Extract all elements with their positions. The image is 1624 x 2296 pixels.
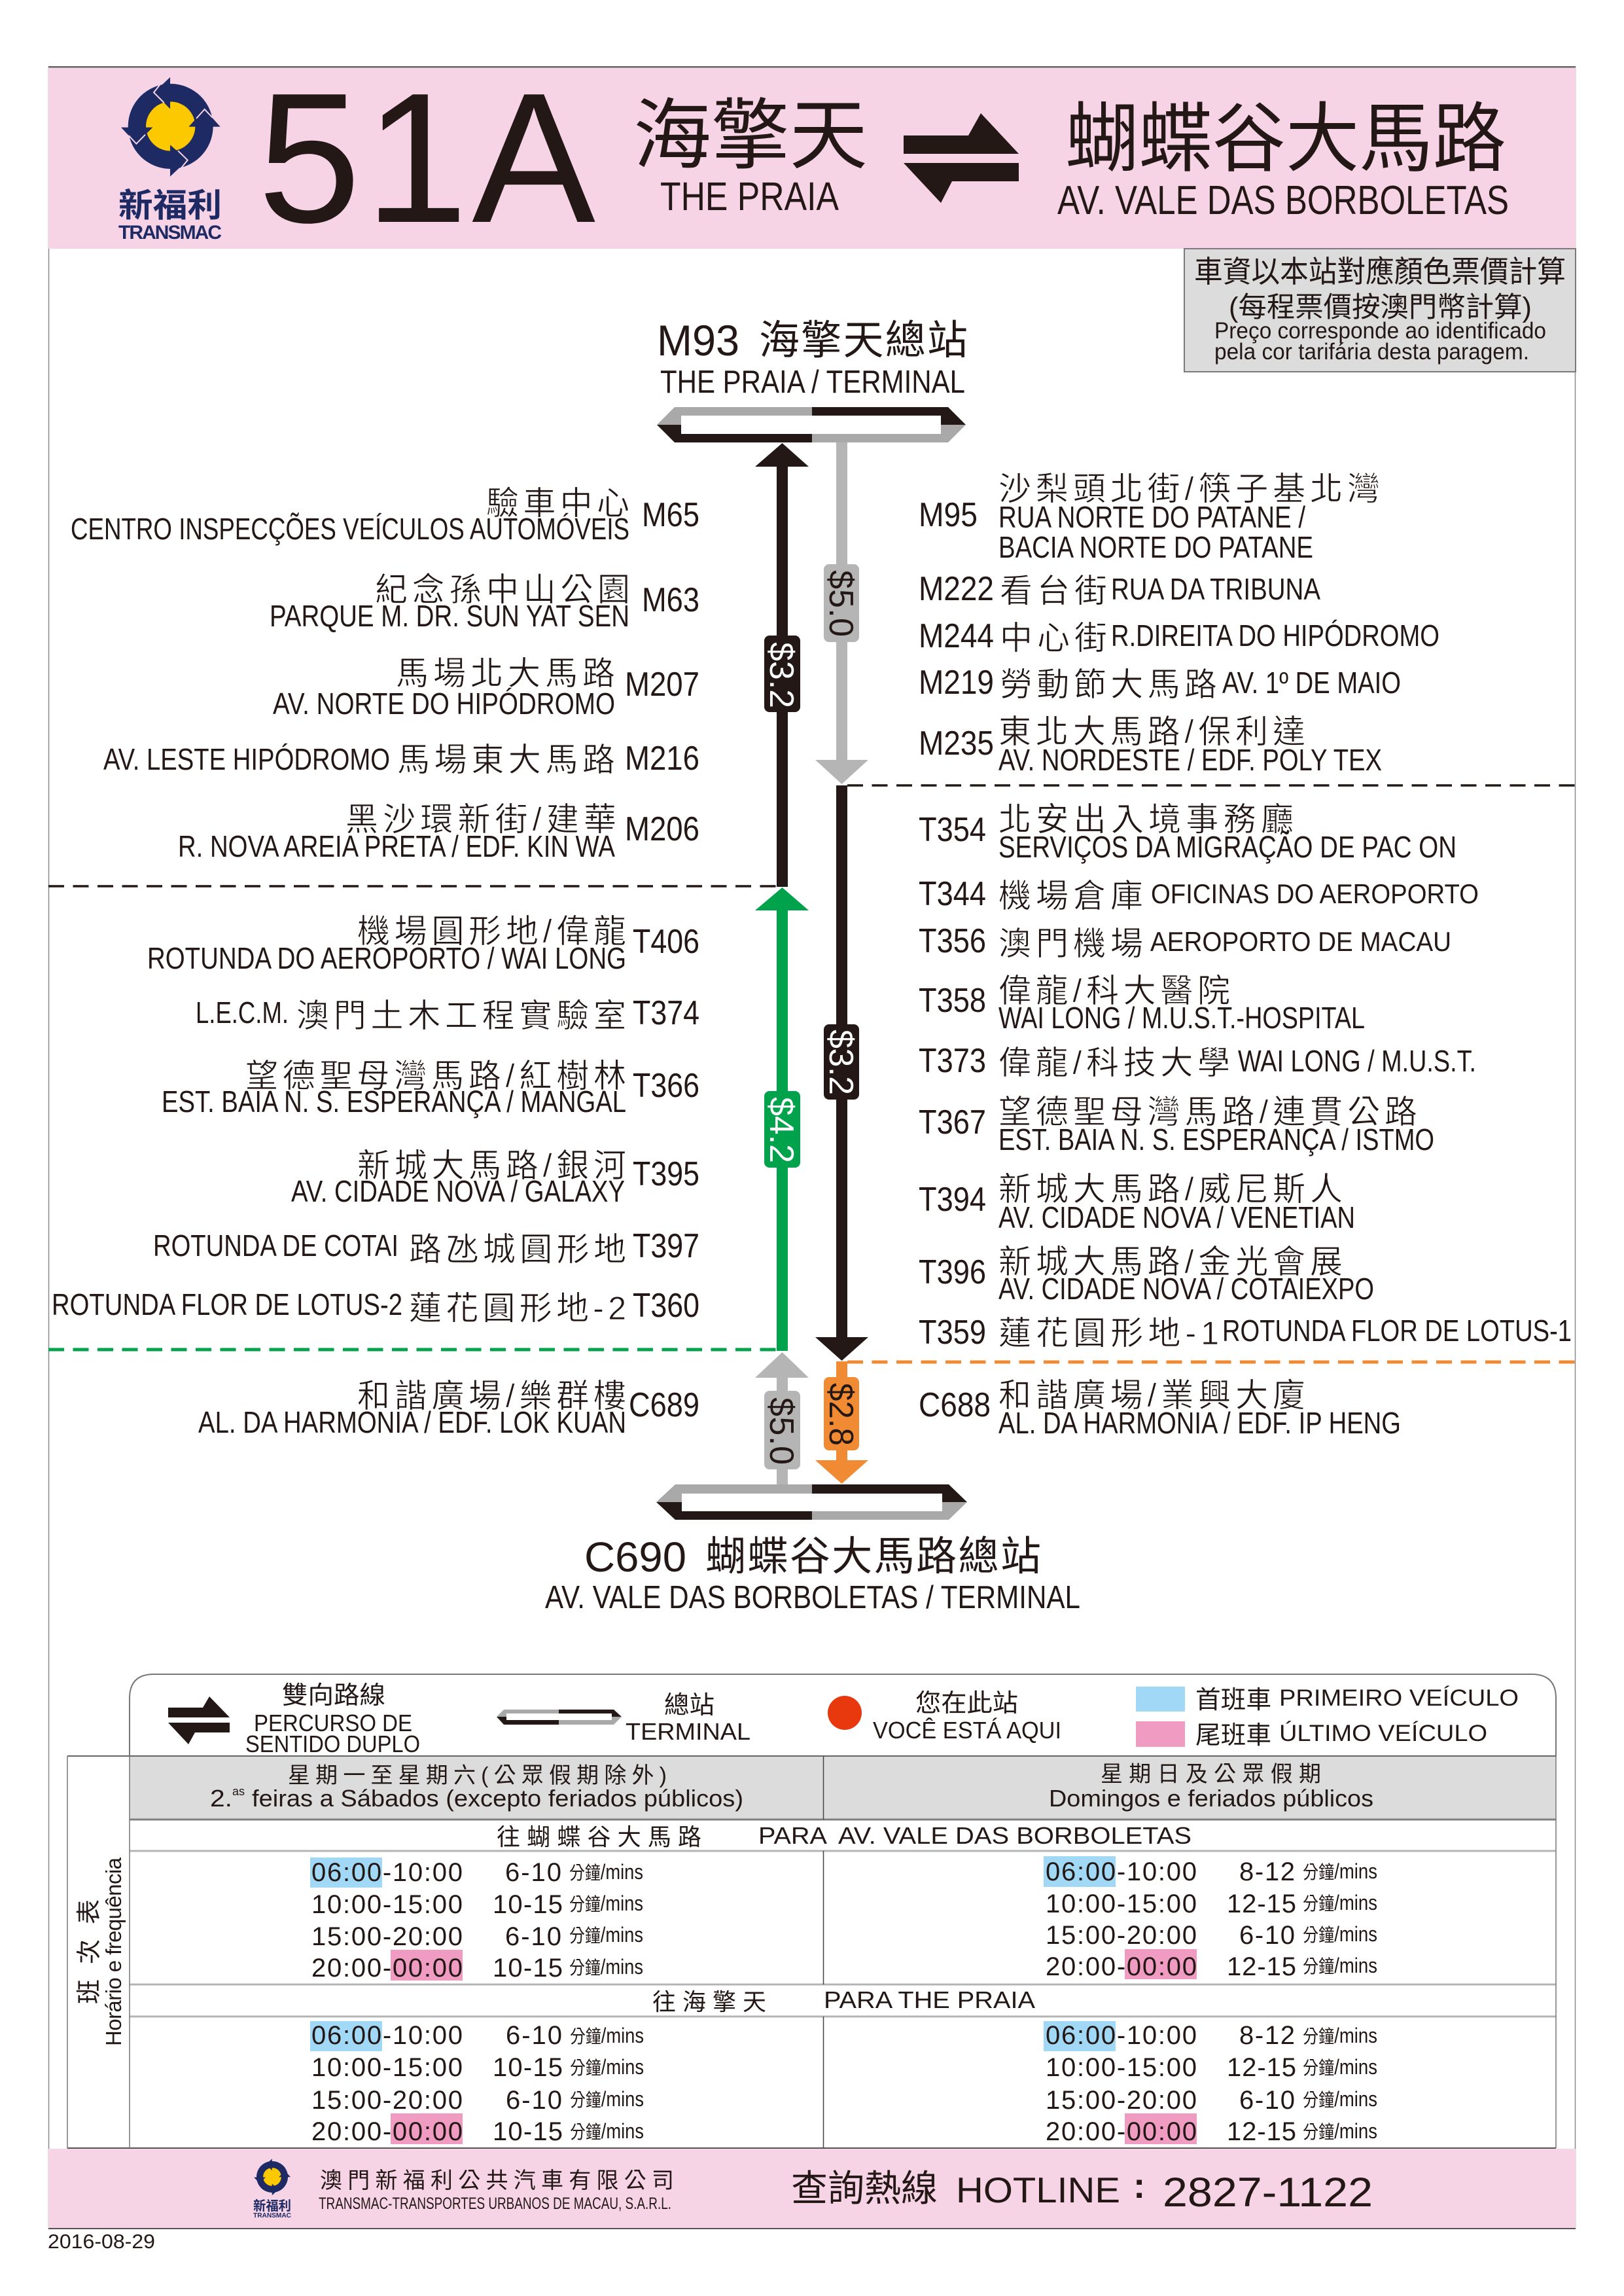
legend: two-way route: SENTIDO DUPLO	[245, 1731, 420, 1757]
stop T360: T360	[633, 1287, 699, 1325]
stop T344: T344	[919, 875, 986, 913]
icon: TRANSMAC logo	[118, 77, 222, 243]
timetable: weekday and holiday header: 星期日及公眾假期	[1101, 1762, 1321, 1787]
stop T394: T394	[919, 1181, 986, 1219]
stop T356: T356	[919, 922, 986, 960]
schedule: weekdays to Av. Vale das Borboletas: 10-15	[493, 1890, 563, 1919]
legend: last bus colour: 尾班車	[1195, 1722, 1271, 1749]
schedule: holidays to Av. Vale das Borboletas: 8-12	[1239, 1857, 1295, 1886]
legend: terminal: 總站	[664, 1692, 715, 1719]
arrow: right orange segment with fare 2.8: $2.8	[822, 1383, 860, 1446]
stop T395: 新城大馬路/銀河	[357, 1147, 626, 1184]
stop M65: CENTRO INSPECÇÕES VEÍCULOS AUTOMÓVEIS	[71, 512, 629, 546]
schedule: weekdays to Av. Vale das Borboletas: 10:00-15:00	[311, 1890, 463, 1919]
stop M235: AV. NORDESTE / EDF. POLY TEX	[998, 743, 1382, 777]
destination name	[1057, 96, 1509, 223]
stop T396: T396	[919, 1253, 986, 1291]
stop M222: RUA DA TRIBUNA	[1111, 572, 1320, 606]
stop M95: 沙梨頭北街/筷子基北灣	[998, 471, 1380, 507]
hotline: 2827-1122	[1163, 2170, 1373, 2215]
schedule: holidays to Av. Vale das Borboletas: 分鐘/mins	[1303, 1859, 1377, 1883]
route number: 51A	[258, 54, 596, 261]
stop C689: AL. DA HARMONIA / EDF. LOK KUAN	[198, 1405, 626, 1439]
stop T396: AV. CIDADE NOVA / COTAIEXPO	[998, 1272, 1374, 1306]
stop M206: R. NOVA AREIA PRETA / EDF. KIN WA	[178, 829, 615, 863]
stop M207	[273, 655, 699, 721]
stop T356: AEROPORTO DE MACAU	[1150, 926, 1451, 957]
timetable: weekday and holiday header: 2.	[210, 1785, 232, 1812]
arrow: left grey segment with fare 5.0	[755, 1352, 809, 1486]
stop M216	[103, 740, 699, 778]
top terminal title: 海擎天總站	[759, 318, 968, 363]
stop T394: 新城大馬路/威尼斯人	[998, 1171, 1343, 1208]
icon: top terminal bar	[657, 407, 966, 442]
stop T397	[153, 1227, 699, 1268]
destination name: AV. VALE DAS BORBOLETAS	[1057, 178, 1509, 223]
date stamp: 2016-08-29	[48, 2230, 155, 2253]
stop T396	[919, 1244, 1374, 1306]
stop T354: 北安出入境事務廳	[998, 801, 1294, 838]
schedule: holidays to The Praia: 12-15	[1227, 2117, 1296, 2146]
stop T359	[919, 1314, 1572, 1352]
stop T344: 機場倉庫	[998, 878, 1143, 914]
legend panel	[130, 1674, 1556, 1757]
schedule: weekdays to The Praia: 10-15	[493, 2117, 563, 2146]
stop T406	[147, 913, 699, 975]
stop M65: 驗車中心	[486, 485, 629, 522]
schedule: weekdays to Av. Vale das Borboletas: 20:00-00:00	[311, 1954, 463, 1982]
stop T406: 機場圓形地/偉龍	[357, 913, 626, 950]
direction heading: to Av. Vale das Borboletas: AV. VALE DAS BORBOLETAS	[838, 1822, 1192, 1849]
hotline: :	[1133, 2165, 1145, 2206]
stop T360	[52, 1287, 699, 1327]
stop T366	[162, 1058, 699, 1119]
stop T397: 路氹城圓形地	[409, 1231, 626, 1268]
timetable: weekday and holiday header: as	[232, 1785, 245, 1798]
arrow: right black segment with fare 3.2: $3.2	[822, 1030, 860, 1095]
stop M206: M206	[625, 810, 699, 848]
stop T354: SERVIÇOS DA MIGRAÇÃO DE PAC ON	[998, 830, 1456, 864]
schedule: holidays to The Praia: 分鐘/mins	[1303, 2087, 1377, 2111]
stop M216: AV. LESTE HIPÓDROMO	[103, 742, 390, 776]
stop M63: PARQUE M. DR. SUN YAT SEN	[270, 599, 629, 633]
stop T374	[196, 994, 699, 1034]
schedule: holidays to The Praia: 6-10	[1239, 2086, 1295, 2115]
schedule: holidays to Av. Vale das Borboletas: 12-15	[1227, 1952, 1296, 1981]
stop M219	[919, 664, 1401, 703]
hotline: HOTLINE	[956, 2170, 1120, 2210]
schedule: holidays to Av. Vale das Borboletas: 06:00-10:00	[1046, 1857, 1197, 1886]
stop M207: AV. NORTE DO HIPÓDROMO	[273, 687, 615, 721]
stop M219: M219	[919, 664, 994, 702]
schedule: weekdays to The Praia: 10-15	[493, 2053, 563, 2082]
footer band	[48, 2149, 1576, 2229]
legend: terminal: TERMINAL	[626, 1718, 750, 1745]
schedule: weekdays to Av. Vale das Borboletas: 分鐘/mins	[569, 1923, 643, 1946]
arrow: left black segment with fare 3.2: $3.2	[762, 642, 800, 708]
schedule: holidays to The Praia: 分鐘/mins	[1303, 2119, 1377, 2143]
schedule: holidays to The Praia: 15:00-20:00	[1046, 2086, 1197, 2115]
schedule: holidays to The Praia: 8-12	[1239, 2021, 1295, 2050]
stop M235: M235	[919, 725, 994, 762]
stop M219: AV. 1º DE MAIO	[1222, 666, 1401, 700]
stop T354: T354	[919, 811, 986, 849]
top terminal title: M93	[657, 316, 739, 365]
stop C688: AL. DA HARMONIA / EDF. IP HENG	[998, 1406, 1401, 1440]
stop M222	[919, 570, 1320, 609]
schedule: holidays to Av. Vale das Borboletas: 15:00-20:00	[1046, 1921, 1197, 1950]
arrow: left green segment with fare 4.2: $4.2	[762, 1097, 800, 1163]
top terminal title	[657, 316, 968, 400]
schedule: holidays to The Praia: 分鐘/mins	[1303, 2024, 1377, 2047]
stop M95: BACIA NORTE DO PATANE	[998, 530, 1313, 564]
legend: terminal	[497, 1692, 750, 1745]
arrow: right grey segment with fare 5.0: $5.0	[822, 570, 860, 637]
stop C689: C689	[629, 1386, 699, 1424]
timetable: weekday and holiday header	[130, 1756, 1556, 1820]
schedule: holidays to The Praia: 分鐘/mins	[1303, 2055, 1377, 2079]
legend: two-way route	[168, 1682, 420, 1757]
legend: last bus colour	[1136, 1721, 1487, 1749]
fare note box	[1184, 249, 1576, 372]
stop T367: 望德聖母灣馬路/連貫公路	[998, 1094, 1417, 1130]
bottom terminal title: C690	[584, 1534, 686, 1581]
dashed fare zone line: black left	[48, 885, 779, 888]
fare note box: (每程票價按澳門幣計算)	[1229, 292, 1532, 323]
icon: TRANSMAC logo: TRANSMAC	[118, 222, 222, 243]
schedule: weekdays to Av. Vale das Borboletas: 6-10	[505, 1858, 561, 1887]
schedule: weekdays to The Praia: 分鐘/mins	[570, 2055, 644, 2079]
fare note box: pela cor tarifária desta paragem.	[1214, 339, 1529, 365]
stop M222: 看台街	[1000, 573, 1107, 609]
stop T356	[919, 922, 1451, 962]
schedule: weekdays to Av. Vale das Borboletas: 分鐘/mins	[569, 1860, 643, 1884]
schedule: weekdays to The Praia: 20:00-00:00	[311, 2117, 463, 2146]
stop M244: M244	[919, 617, 994, 655]
timetable: side title	[76, 1857, 126, 2046]
arrow: left black segment with fare 3.2	[755, 443, 809, 887]
legend: two-way route: 雙向路線	[282, 1682, 385, 1710]
stop M95	[919, 471, 1380, 564]
arrow: right black segment with fare 3.2	[815, 785, 868, 1361]
icon: small TRANSMAC logo: 新福利	[253, 2198, 291, 2214]
stop T373: 偉龍/科技大學	[998, 1045, 1230, 1081]
stop M222: M222	[919, 570, 994, 608]
bottom terminal title: 蝴蝶谷大馬路總站	[705, 1534, 1041, 1579]
schedule: weekdays to Av. Vale das Borboletas: 15:00-20:00	[311, 1922, 463, 1951]
fare note box: Preço corresponde ao identificado	[1214, 318, 1546, 344]
hotline	[791, 2165, 1373, 2215]
stop M219: 勞動節大馬路	[1000, 666, 1217, 703]
hotline: 查詢熱線	[791, 2168, 938, 2209]
icon: bottom terminal bar	[656, 1484, 967, 1520]
dashed fare zone line: orange	[847, 1360, 1576, 1364]
legend: first bus colour: 首班車	[1195, 1687, 1271, 1714]
schedule: weekdays to Av. Vale das Borboletas: 10-15	[493, 1954, 563, 1982]
stop C688: 和諧廣場/業興大廈	[998, 1377, 1305, 1414]
dashed fare zone line: black right	[847, 784, 1576, 787]
stop C688: C688	[919, 1386, 991, 1424]
stop T360: 蓮花圓形地-2	[409, 1290, 626, 1327]
stop M216: 馬場東大馬路	[397, 742, 615, 778]
schedule: holidays to The Praia	[1044, 2021, 1377, 2146]
legend: you are here: 您在此站	[915, 1690, 1018, 1717]
stop T358	[919, 973, 1365, 1035]
stop T367	[919, 1094, 1434, 1157]
schedule: holidays to The Praia: 12-15	[1227, 2053, 1296, 2082]
stop M63	[270, 571, 699, 633]
company name: 澳門新福利公共汽車有限公司	[320, 2168, 674, 2193]
stop M207: M207	[625, 666, 699, 704]
schedule: holidays to Av. Vale das Borboletas: 分鐘/mins	[1303, 1922, 1377, 1946]
stop T356: 澳門機場	[998, 925, 1143, 962]
stop M63: 紀念孫中山公園	[375, 571, 630, 608]
schedule: weekdays to Av. Vale das Borboletas: 6-10	[505, 1922, 561, 1951]
timetable: side title: Horário e frequência	[101, 1857, 126, 2046]
stop T374: T374	[633, 994, 699, 1032]
schedule: weekdays to The Praia: 06:00-10:00	[311, 2021, 463, 2050]
direction heading: to The Praia: PARA THE PRAIA	[824, 1986, 1035, 2013]
stop M207: 馬場北大馬路	[396, 655, 615, 692]
stop T344: OFICINAS DO AEROPORTO	[1151, 878, 1479, 909]
schedule: holidays to The Praia: 06:00-10:00	[1046, 2021, 1197, 2050]
icon: small TRANSMAC logo: TRANSMAC	[253, 2212, 291, 2219]
stop C689	[198, 1378, 699, 1439]
schedule: weekdays to The Praia: 分鐘/mins	[570, 2087, 644, 2111]
schedule: holidays to The Praia: 20:00-00:00	[1046, 2117, 1197, 2146]
direction heading: to Av. Vale das Borboletas	[497, 1822, 1192, 1850]
direction heading: to The Praia	[652, 1986, 1035, 2015]
direction heading: to Av. Vale das Borboletas: PARA	[758, 1822, 827, 1849]
stop T394	[919, 1171, 1355, 1234]
stop M235: 東北大馬路/保利達	[998, 713, 1305, 750]
stop M216: M216	[625, 740, 699, 778]
stop C688	[919, 1377, 1401, 1440]
stop T373	[919, 1042, 1476, 1081]
company name	[319, 2168, 674, 2213]
stop M235	[919, 713, 1382, 777]
schedule: holidays to Av. Vale das Borboletas: 分鐘/mins	[1303, 1954, 1377, 1977]
stop M206	[178, 801, 699, 863]
stop M65: M65	[642, 496, 699, 534]
schedule: weekdays to The Praia: 6-10	[506, 2021, 562, 2050]
stop T373: WAI LONG / M.U.S.T.	[1238, 1044, 1476, 1078]
stop T373: T373	[919, 1042, 986, 1080]
stop T394: AV. CIDADE NOVA / VENETIAN	[998, 1200, 1355, 1234]
stop T366: T366	[633, 1067, 699, 1105]
origin name: 海擎天	[633, 93, 868, 179]
schedule: holidays to Av. Vale das Borboletas: 分鐘/mins	[1303, 1891, 1377, 1914]
stop T354	[919, 801, 1456, 864]
destination name: 蝴蝶谷大馬路	[1065, 96, 1506, 181]
legend: you are here	[828, 1690, 1061, 1744]
stop M95: M95	[919, 496, 978, 534]
stop M206: 黑沙環新街/建華	[345, 801, 616, 838]
stop T395: AV. CIDADE NOVA / GALAXY	[291, 1174, 625, 1208]
stop T366: 望德聖母灣馬路/紅樹林	[245, 1058, 626, 1094]
legend: two-way route: PERCURSO DE	[254, 1710, 412, 1736]
schedule: weekdays to The Praia: 15:00-20:00	[311, 2086, 463, 2115]
timetable	[67, 1756, 1556, 2148]
legend: first bus colour: PRIMEIRO VEÍCULO	[1279, 1685, 1519, 1711]
bottom terminal title	[545, 1534, 1080, 1615]
schedule: weekdays to Av. Vale das Borboletas: 分鐘/mins	[569, 1955, 643, 1979]
schedule: holidays to Av. Vale das Borboletas: 12-15	[1227, 1890, 1296, 1918]
timetable: side title: 班次表	[76, 1899, 103, 2004]
stop T397: T397	[633, 1227, 699, 1265]
stop T359: T359	[919, 1314, 986, 1352]
stop T367: T367	[919, 1103, 986, 1141]
legend: first bus colour	[1136, 1685, 1519, 1714]
direction heading: to Av. Vale das Borboletas: 往蝴蝶谷大馬路	[497, 1823, 701, 1850]
origin name	[633, 93, 868, 219]
stop T358: 偉龍/科大醫院	[998, 973, 1230, 1009]
header band	[48, 54, 1576, 261]
schedule: weekdays to The Praia	[310, 2021, 644, 2146]
stop T374: 澳門土木工程實驗室	[296, 997, 626, 1034]
stop T395: T395	[633, 1155, 699, 1193]
schedule: holidays to Av. Vale das Borboletas: 6-10	[1239, 1921, 1295, 1950]
stop C689: 和諧廣場/樂群樓	[357, 1378, 626, 1414]
legend: you are here: VOCÊ ESTÁ AQUI	[873, 1717, 1061, 1744]
schedule: weekdays to The Praia: 分鐘/mins	[570, 2119, 644, 2143]
stop M244: R.DIREITA DO HIPÓDROMO	[1111, 619, 1439, 653]
stop T358: T358	[919, 982, 986, 1020]
stop M95: RUA NORTE DO PATANE /	[998, 500, 1305, 534]
stop M244	[919, 617, 1439, 656]
schedule: holidays to Av. Vale das Borboletas	[1044, 1856, 1377, 1981]
schedule: weekdays to The Praia: 6-10	[506, 2086, 562, 2115]
arrow: right grey segment with fare 5.0	[815, 441, 868, 784]
stop M63: M63	[642, 581, 699, 619]
timetable: weekday and holiday header: feiras a Sábados (excepto feriados públicos)	[252, 1785, 743, 1812]
schedule: weekdays to Av. Vale das Borboletas: 分鐘/mins	[569, 1892, 643, 1915]
stop T367: EST. BAIA N. S. ESPERANÇA / ISTMO	[998, 1122, 1434, 1157]
arrow: left grey segment with fare 5.0: $5.0	[762, 1397, 800, 1465]
arrow: left green segment with fare 4.2	[755, 888, 809, 1351]
stop T406: T406	[633, 923, 699, 961]
schedule: holidays to The Praia: 10:00-15:00	[1046, 2053, 1197, 2082]
top terminal title: THE PRAIA / TERMINAL	[660, 365, 965, 400]
schedule: weekdays to Av. Vale das Borboletas	[310, 1857, 643, 1982]
schedule: weekdays to Av. Vale das Borboletas: 06:00-10:00	[311, 1858, 463, 1887]
stop T396: 新城大馬路/金光會展	[998, 1244, 1343, 1280]
dashed fare zone line: green	[48, 1348, 779, 1351]
direction heading: to The Praia: 往海擎天	[652, 1988, 766, 2015]
schedule: weekdays to The Praia: 分鐘/mins	[570, 2024, 644, 2047]
stop T359: 蓮花圓形地-1	[998, 1315, 1219, 1352]
arrow: right orange segment with fare 2.8	[815, 1361, 868, 1484]
stop T395	[291, 1147, 699, 1208]
legend: last bus colour: ÚLTIMO VEÍCULO	[1279, 1721, 1487, 1746]
stop M65	[71, 485, 699, 546]
stop T366: EST. BAIA N. S. ESPERANÇA / MANGAL	[162, 1085, 626, 1119]
stop M244: 中心街	[1000, 620, 1107, 656]
stop T397: ROTUNDA DE COTAI	[153, 1229, 398, 1263]
schedule: holidays to Av. Vale das Borboletas: 10:00-15:00	[1046, 1890, 1197, 1918]
stop T344	[919, 875, 1479, 914]
icon: two-way arrows	[904, 113, 1019, 203]
schedule: weekdays to The Praia: 10:00-15:00	[311, 2053, 463, 2082]
bottom terminal title: AV. VALE DAS BORBOLETAS / TERMINAL	[545, 1580, 1080, 1615]
stop T360: ROTUNDA FLOR DE LOTUS-2	[52, 1287, 402, 1321]
origin name: THE PRAIA	[660, 174, 839, 219]
icon: TRANSMAC logo: 新福利	[118, 187, 222, 224]
company name: TRANSMAC-TRANSPORTES URBANOS DE MACAU, S.A.R.L.	[319, 2195, 671, 2213]
schedule: holidays to Av. Vale das Borboletas: 20:00-00:00	[1046, 1952, 1197, 1981]
icon: small TRANSMAC logo	[253, 2159, 291, 2219]
stop T406: ROTUNDA DO AEROPORTO / WAI LONG	[147, 941, 626, 975]
timetable: weekday and holiday header: Domingos e feriados públicos	[1049, 1785, 1373, 1812]
stop T358: WAI LONG / M.U.S.T.-HOSPITAL	[998, 1001, 1365, 1035]
fare note box: 車資以本站對應顏色票價計算	[1194, 255, 1566, 289]
timetable: weekday and holiday header: 星期一至星期六(公眾假期除外)	[288, 1763, 667, 1788]
stop T374: L.E.C.M.	[196, 996, 289, 1030]
